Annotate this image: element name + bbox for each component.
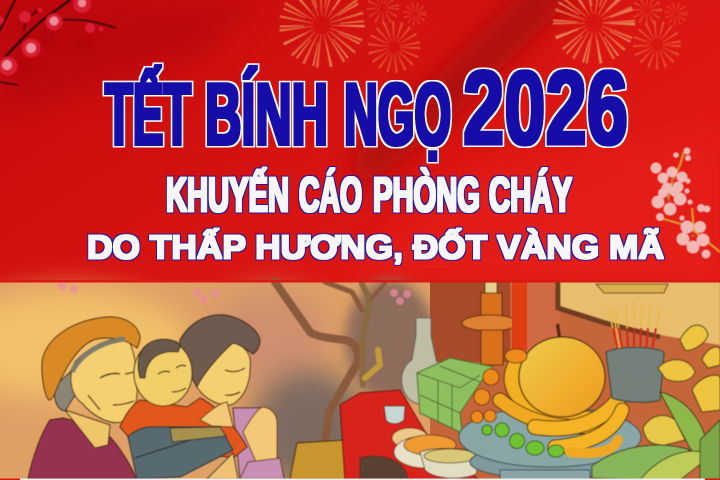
jar — [290, 440, 362, 479]
red table cloth — [340, 390, 478, 479]
banh chung — [417, 358, 493, 433]
icon: large firework right — [565, 0, 623, 52]
flower 2 — [658, 360, 695, 381]
title word: TẾT: TẾT — [105, 64, 191, 164]
icon: firework 5 — [638, 1, 656, 19]
icon: firework 6 — [669, 7, 683, 21]
grandmother — [28, 317, 140, 479]
fruit tray — [459, 407, 641, 480]
icon: firework 2 — [373, 0, 393, 18]
title year: 2026 — [463, 50, 628, 167]
word: CHÁY: CHÁY — [489, 168, 572, 222]
icon: blossom 3 — [676, 220, 710, 254]
small dishes — [360, 406, 480, 479]
title word: NGỌ: NGỌ — [344, 64, 451, 164]
icon: plum branch top left — [0, 0, 115, 85]
bottle — [402, 318, 440, 404]
candle holder — [462, 282, 518, 365]
illustration background — [0, 280, 720, 480]
baby blanket — [128, 427, 238, 479]
icon: blossom 1 — [658, 166, 688, 194]
incense pot — [606, 302, 664, 402]
word: CÁO: CÁO — [299, 168, 362, 222]
title — [105, 50, 628, 167]
title word: BÍNH: BÍNH — [205, 64, 328, 164]
icon: firework 7 — [642, 30, 672, 60]
woman — [180, 315, 284, 479]
leaves and flowers — [592, 325, 720, 480]
pomelo — [519, 323, 605, 417]
word: PHÒNG: PHÒNG — [373, 168, 480, 222]
praying hands — [200, 402, 284, 479]
word: KHUYẾN: KHUYẾN — [166, 168, 289, 222]
panel: red banner background — [0, 0, 720, 283]
small fruits — [471, 349, 564, 457]
icon: pink blossoms right — [650, 148, 720, 258]
red pillar — [512, 282, 527, 350]
red divider top edge — [0, 280, 720, 282]
icon: blossom 2 — [652, 187, 686, 216]
flower 4 — [692, 375, 720, 412]
picture frame — [558, 282, 720, 345]
bottom edge strip — [0, 478, 720, 480]
panel: illustration of family offering at altar — [0, 280, 720, 480]
tree trunk — [275, 282, 385, 440]
icon: fireworks — [292, 0, 683, 63]
icon: firework 4 — [408, 7, 422, 21]
flower 3 — [702, 347, 720, 368]
child — [120, 339, 247, 458]
flower 1 — [680, 325, 708, 350]
subtitle: DO THẤP HƯƠNG, ĐỐT VÀNG MÃ: DO THẤP HƯƠNG, ĐỐT VÀNG MÃ — [87, 228, 664, 266]
icon: firework 3 — [378, 31, 410, 63]
icon: large firework left — [292, 0, 352, 55]
bananas — [500, 360, 622, 453]
blossoms in background — [58, 282, 411, 305]
subtitle: KHUYẾN CÁO PHÒNG CHÁY — [166, 168, 572, 222]
